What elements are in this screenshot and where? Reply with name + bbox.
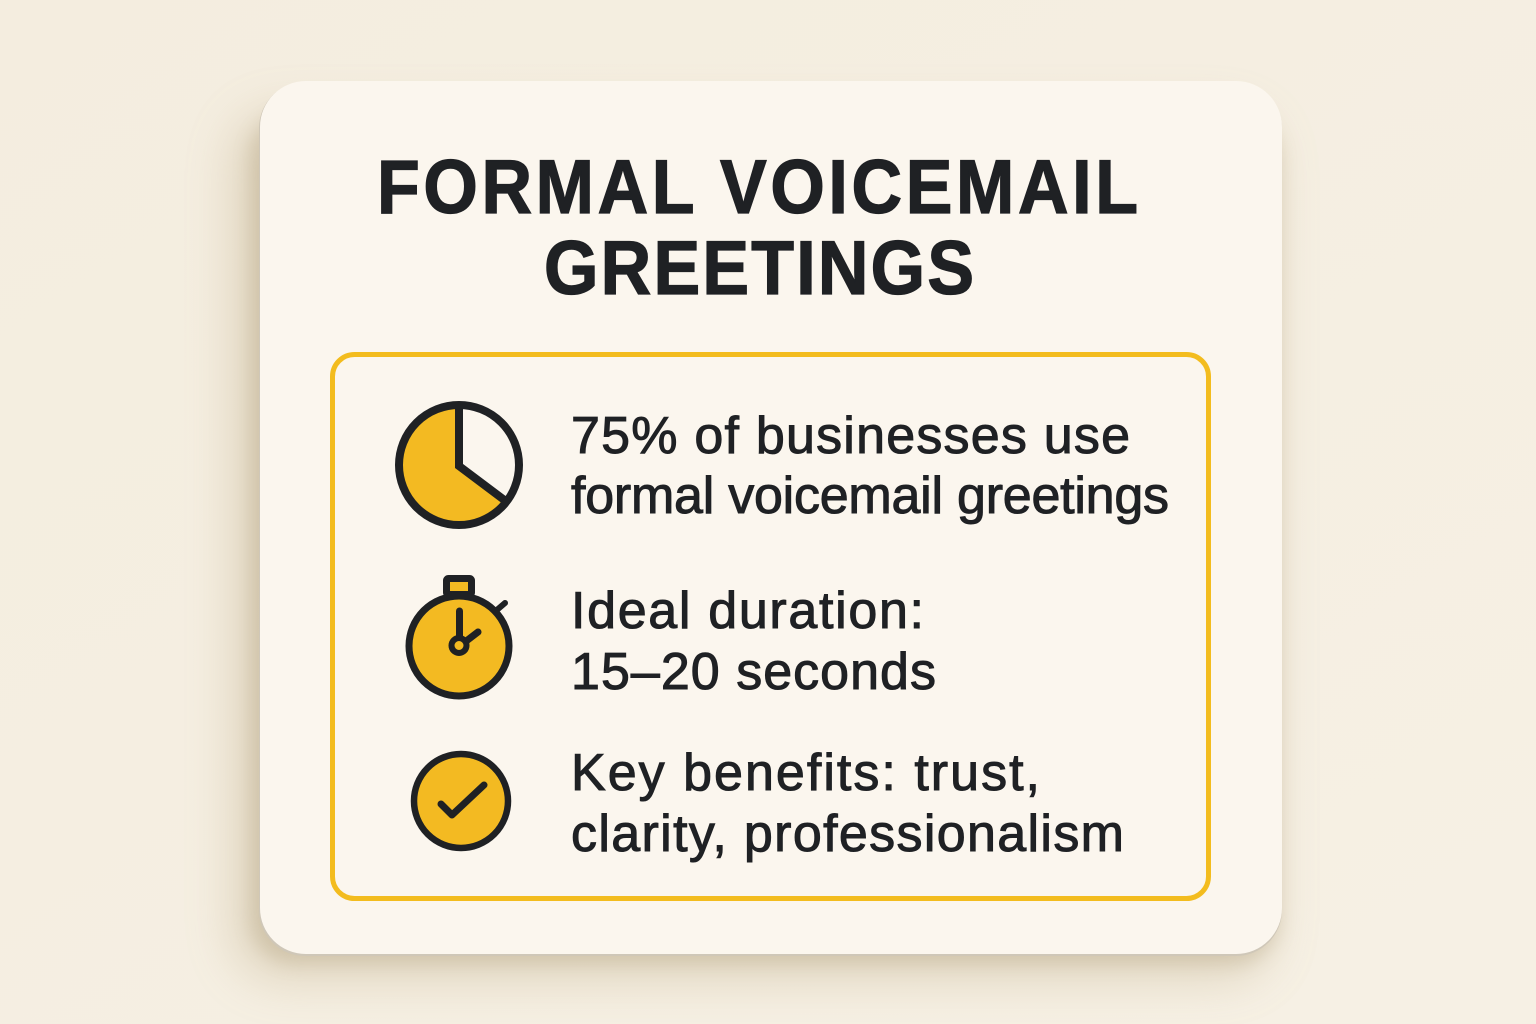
text: usage statistic: formal voicemail greetings <box>571 467 1169 525</box>
text: ideal duration: 15–20 seconds <box>571 643 936 701</box>
text: usage statistic <box>571 407 1169 525</box>
title: GREETINGS <box>544 225 974 311</box>
text: ideal duration <box>571 582 936 701</box>
text: key benefits: clarity, professionalism <box>571 805 1124 863</box>
text: usage statistic: 75% of businesses use <box>571 407 1130 465</box>
card shadow <box>232 110 1280 980</box>
icon: stopwatch <box>409 578 509 696</box>
title: FORMAL VOICEMAIL <box>377 144 1138 230</box>
text: key benefits: Key benefits: trust, <box>571 744 1040 802</box>
panel: stats box <box>332 354 1208 898</box>
text: ideal duration: Ideal duration: <box>571 582 924 640</box>
icon: check badge <box>414 754 508 848</box>
text: key benefits <box>571 744 1124 863</box>
title <box>377 144 1138 311</box>
icon: pie chart <box>399 403 519 525</box>
panel: main card <box>259 81 1282 956</box>
